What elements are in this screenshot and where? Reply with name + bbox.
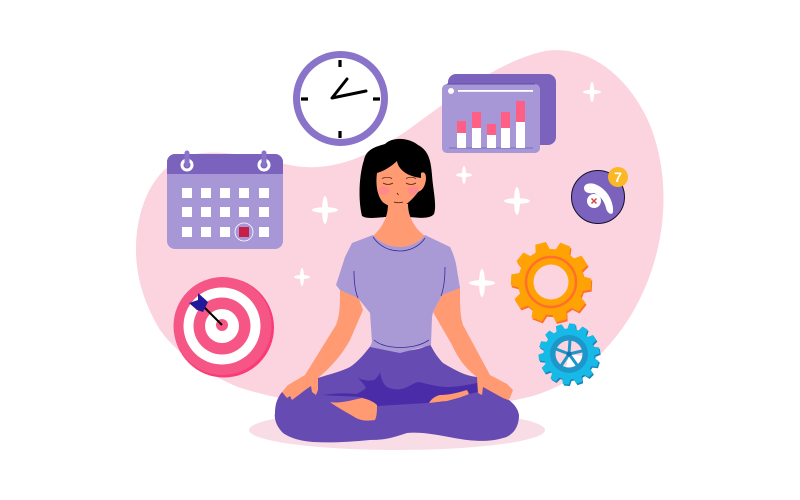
right arm: [433, 286, 513, 400]
blush left: [378, 186, 390, 195]
sparkle 1: [312, 196, 338, 224]
icon: orange gear: [499, 230, 604, 336]
blush right: [408, 186, 418, 195]
sparkle 4: [583, 82, 601, 102]
icon: target with arrow: [174, 277, 274, 378]
figure: meditating woman: [275, 139, 519, 442]
neck and chest: [373, 204, 425, 256]
sparkle 5: [294, 268, 310, 286]
sparkle 2: [456, 166, 472, 184]
left foot: [330, 398, 377, 421]
icon: missed call badge: [572, 167, 628, 224]
icon: bar chart window: [442, 74, 556, 153]
icon: wall clock: [296, 54, 384, 142]
right foot: [429, 390, 469, 403]
icon: calendar: [167, 153, 283, 249]
face: [376, 161, 426, 207]
closed eyes, nose and mouth: [382, 177, 416, 203]
notification count: 7: [614, 169, 622, 185]
icon: blue gear: [535, 320, 604, 389]
T-shirt: [336, 235, 460, 353]
trousers: [275, 344, 519, 442]
sparkle 3: [504, 187, 530, 215]
left arm: [282, 288, 363, 400]
bar chart: [449, 101, 533, 149]
hair: [360, 139, 435, 218]
sparkle 6: [469, 269, 495, 297]
background pink blob: [136, 50, 664, 420]
ground shadow ellipse: [249, 410, 545, 450]
T-shirt seams: [354, 237, 445, 348]
trouser shadow fold: [323, 372, 478, 406]
